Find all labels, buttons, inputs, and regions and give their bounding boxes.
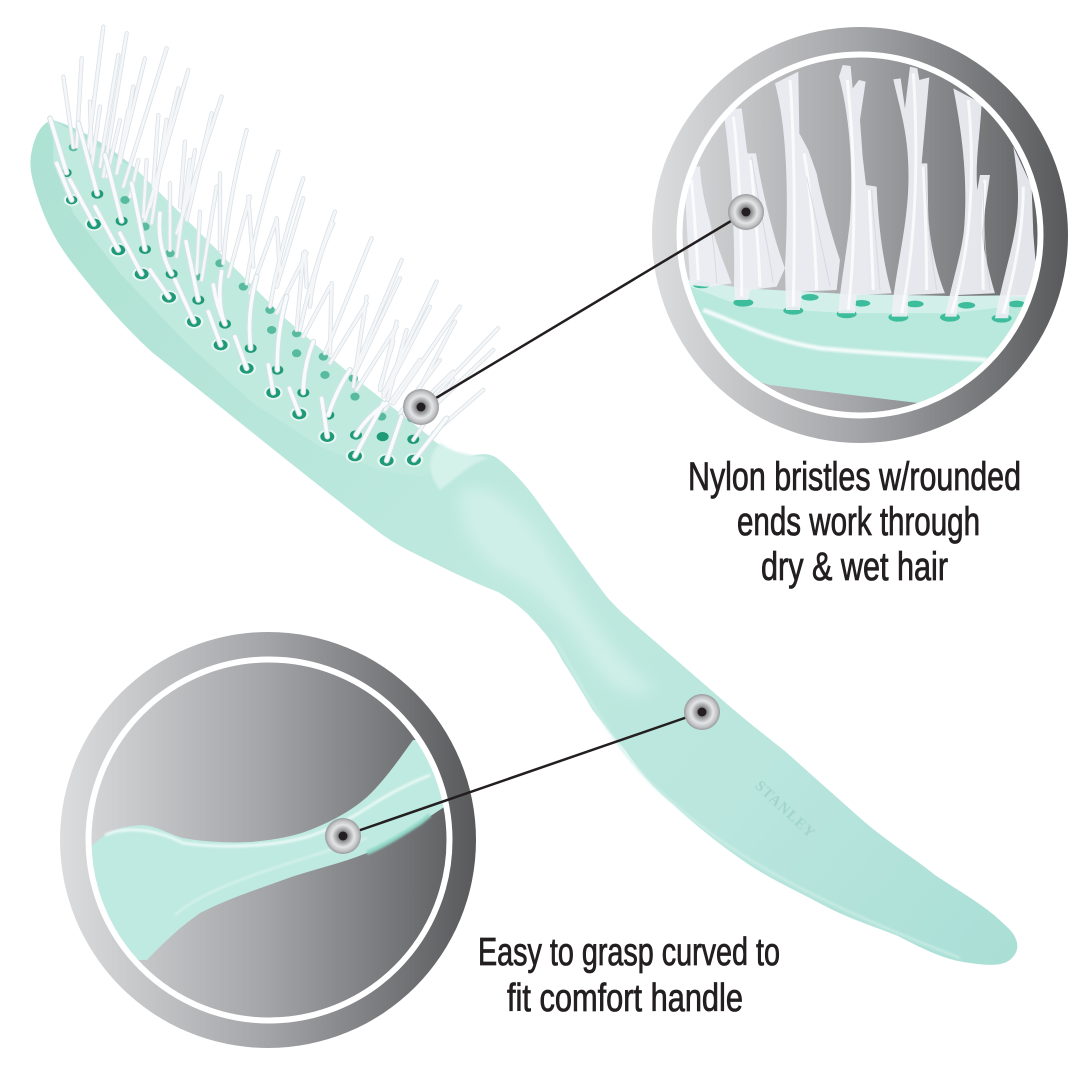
- caption: bristles: ends work through: [737, 500, 980, 544]
- front bristles: [50, 118, 447, 461]
- lower edge rim: [555, 640, 960, 958]
- handle highlight: [459, 487, 655, 694]
- inner white ring: [88, 660, 450, 1020]
- panel: handle close-up: [60, 632, 476, 1048]
- top highlight: [105, 775, 430, 846]
- leader line: handle: [343, 712, 702, 836]
- brush: [30, 27, 1017, 965]
- close-up holes: [693, 282, 1025, 323]
- neck ridge: [431, 443, 490, 490]
- close-up plate: [680, 278, 1037, 313]
- close-up highlight: [703, 310, 987, 360]
- brand emboss: STANLEY: [751, 778, 819, 842]
- tall bristles: [63, 27, 498, 440]
- brush body: [30, 120, 1017, 965]
- inner white ring: [680, 54, 1040, 416]
- caption: handle: Easy to grasp curved to: [478, 931, 780, 974]
- caption: bristles: [688, 455, 1021, 589]
- lower highlight: [175, 838, 367, 915]
- ring: [652, 27, 1068, 443]
- close-up strand shading: [703, 157, 990, 290]
- caption: bristles: dry & wet hair: [761, 545, 948, 589]
- marker: bristles on brush: [403, 389, 439, 425]
- close-up bristle strands: [692, 73, 1023, 313]
- caption: handle: [478, 931, 780, 1020]
- bristle plate: [53, 120, 457, 477]
- lower edge shadow: [367, 815, 430, 853]
- caption: handle: fit comfort handle: [507, 977, 743, 1020]
- close-up handle: [80, 740, 470, 960]
- panel: bristle close-up: [652, 27, 1068, 443]
- marker: handle on brush: [684, 694, 720, 730]
- marker: handle close-up: [325, 818, 361, 854]
- ring: [60, 632, 476, 1048]
- leader line: bristles: [421, 212, 746, 407]
- close-up brush body: [690, 287, 1022, 403]
- marker: bristles close-up: [728, 194, 764, 230]
- close-up contents: [80, 740, 470, 960]
- close-up bristle tufts: [685, 65, 1038, 318]
- close-up contents: [686, 65, 1036, 403]
- bristle holes: [62, 143, 423, 468]
